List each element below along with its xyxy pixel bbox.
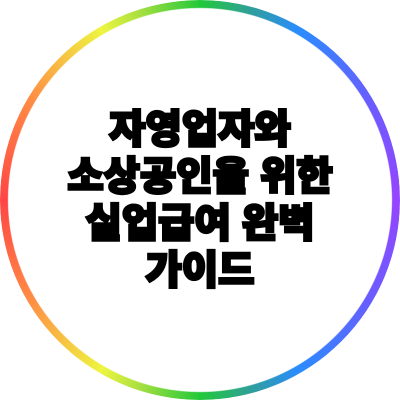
title line 2: 소상공인을 위한 xyxy=(67,155,333,199)
title line 3: 실업급여 완벽 xyxy=(85,202,314,246)
title line 1: 자영업자와 xyxy=(109,108,291,152)
title line 4: 가이드 xyxy=(145,249,255,293)
